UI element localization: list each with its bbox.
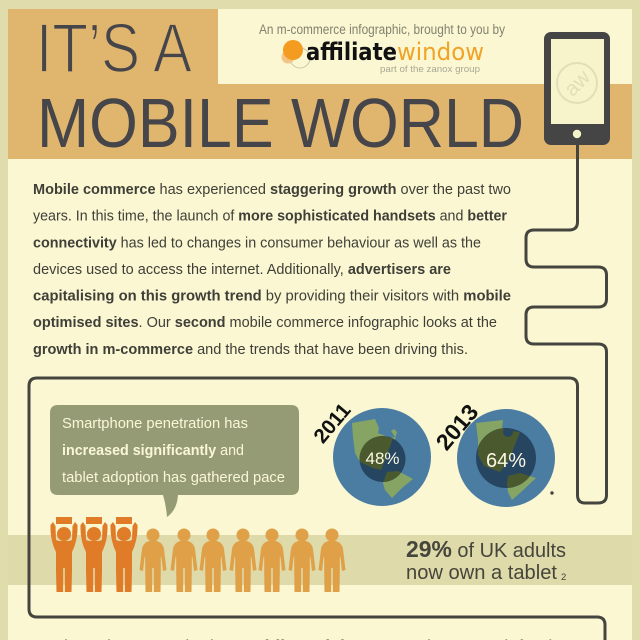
label: 2013: 2013 bbox=[431, 399, 483, 455]
tagline: An m-commerce infographic, brought to you by bbox=[259, 22, 505, 37]
panel: title background bbox=[8, 9, 632, 159]
callout: smartphone penetration: tablet adoption has gathered pace bbox=[62, 469, 285, 486]
cord: phone cable forming the content frame bbox=[29, 145, 606, 640]
person with tablet 1 bbox=[50, 517, 78, 592]
text block: introduction: capitalising on this growth trend by providing their visitors with mobile bbox=[33, 288, 511, 305]
value: 48%: 48% bbox=[365, 449, 400, 468]
logo wordmark: affiliate: affiliate bbox=[306, 38, 397, 66]
callout: smartphone penetration: increased significantly and bbox=[62, 442, 244, 459]
person with tablet 2 bbox=[80, 517, 108, 592]
callout: smartphone penetration: Smartphone penetration has bbox=[62, 415, 248, 432]
icon: logo circles bbox=[282, 40, 310, 68]
label: 2011: 2011 bbox=[309, 399, 355, 448]
title line: Mobile World: MOBILE WORLD bbox=[37, 84, 524, 162]
value: 64%: 64% bbox=[486, 450, 526, 472]
logo: affiliate window bbox=[282, 38, 484, 75]
text block: introduction: devices used to access the internet. Additionally, advertisers are bbox=[33, 261, 451, 278]
statistic: tablet ownership: now own a tablet bbox=[406, 562, 557, 584]
logo wordmark: window: window bbox=[397, 38, 484, 66]
footnote marker bbox=[550, 491, 554, 495]
callout: smartphone penetration bbox=[50, 405, 299, 517]
text block: introduction: years. In this time, the launch of more sophisticated handsets and better bbox=[33, 208, 507, 225]
statistic: tablet ownership bbox=[406, 536, 566, 584]
chart: smartphone penetration 2013 globe bbox=[457, 409, 555, 507]
title bbox=[36, 9, 524, 162]
pictogram: tablet owners bbox=[50, 517, 138, 592]
band: tablet statistic background bbox=[8, 535, 632, 585]
text block: introduction bbox=[33, 181, 511, 358]
pictogram: people without tablets bbox=[140, 528, 346, 592]
text block: introduction: growth in m-commerce and the trends that have been driving this. bbox=[33, 341, 468, 358]
text block: introduction: optimised sites. Our second mobile commerce infographic looks at the bbox=[33, 314, 497, 331]
person with tablet 3 bbox=[110, 517, 138, 592]
text block: introduction: connectivity has led to changes in consumer behaviour as well as the bbox=[33, 234, 481, 251]
icon: smartphone bbox=[544, 32, 610, 145]
icon: aw watermark: aw bbox=[560, 65, 596, 101]
title line: It's a: IT’S A bbox=[36, 9, 192, 87]
logo subline: part of the zanox group bbox=[380, 64, 480, 75]
text block: introduction: Mobile commerce has experienced staggering growth over the past two bbox=[33, 181, 511, 198]
statistic: tablet ownership: 29% of UK adults bbox=[406, 536, 566, 562]
chart: smartphone penetration 2011 globe bbox=[333, 408, 431, 506]
statistic: tablet ownership: 2 bbox=[561, 572, 566, 583]
